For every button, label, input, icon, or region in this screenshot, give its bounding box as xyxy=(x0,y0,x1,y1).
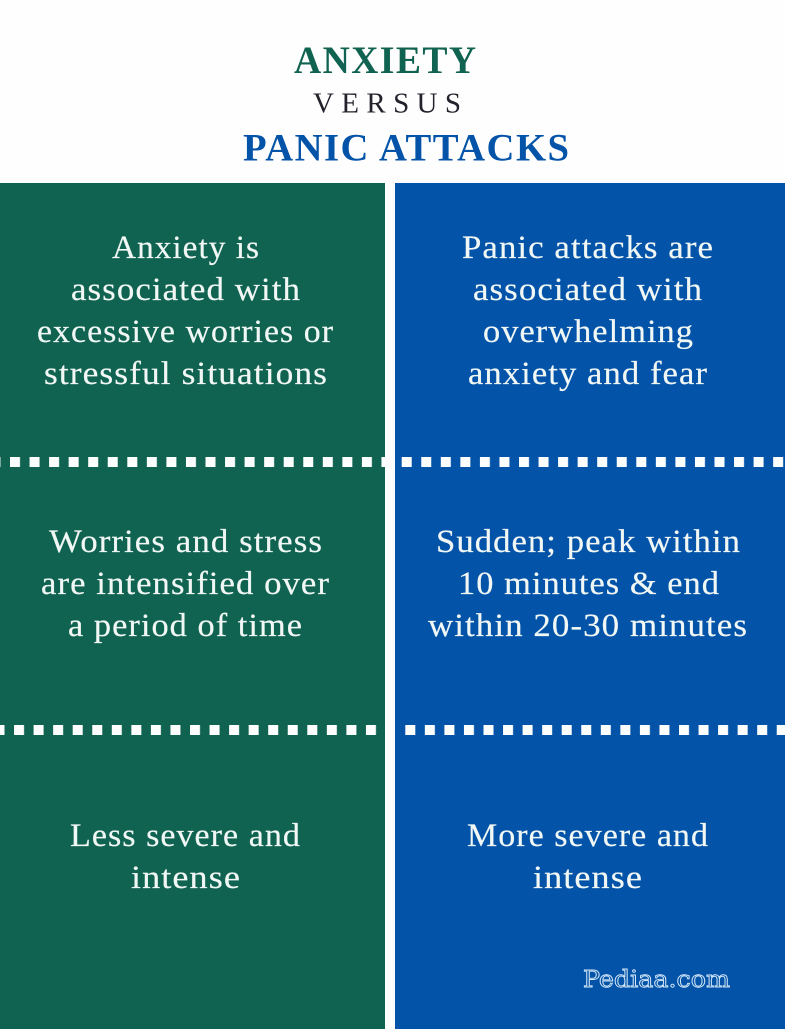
text: panic severity xyxy=(467,818,709,896)
text: panic association: overwhelming xyxy=(483,314,694,350)
text: panic association xyxy=(462,230,714,392)
text: anxiety onset: Worries and stress xyxy=(49,524,323,560)
text: anxiety onset: are intensified over xyxy=(41,566,330,602)
heading: panic attacks: PANIC ATTACKS xyxy=(243,126,570,170)
text: anxiety onset xyxy=(41,524,330,644)
text: anxiety severity: intense xyxy=(131,860,241,896)
panel: panic attacks column xyxy=(395,183,785,1029)
text: panic association: Panic attacks are xyxy=(462,230,714,266)
text: panic onset: 10 minutes & end xyxy=(458,566,720,602)
text: anxiety severity xyxy=(70,818,301,896)
text: panic severity: More severe and xyxy=(467,818,709,854)
text: anxiety association: Anxiety is xyxy=(112,230,260,266)
text: anxiety association xyxy=(37,230,334,392)
text: panic onset xyxy=(428,524,748,644)
text: anxiety association: excessive worries or xyxy=(37,314,334,350)
title xyxy=(243,38,570,170)
text: panic onset: within 20-30 minutes xyxy=(428,608,748,644)
heading: anxiety: ANXIETY xyxy=(294,38,478,82)
text: panic onset: Sudden; peak within xyxy=(436,524,741,560)
text: anxiety onset: a period of time xyxy=(68,608,303,644)
text: anxiety severity: Less severe and xyxy=(70,818,301,854)
heading: versus: VERSUS xyxy=(313,88,461,120)
text: anxiety association: associated with xyxy=(71,272,301,308)
text: anxiety association: stressful situations xyxy=(44,356,328,392)
panel: anxiety column xyxy=(0,183,385,1029)
text: panic severity: intense xyxy=(533,860,643,896)
text: panic association: associated with xyxy=(473,272,703,308)
text: panic association: anxiety and fear xyxy=(468,356,708,392)
logo: Pediaa.com: Pediaa.com xyxy=(583,967,730,993)
